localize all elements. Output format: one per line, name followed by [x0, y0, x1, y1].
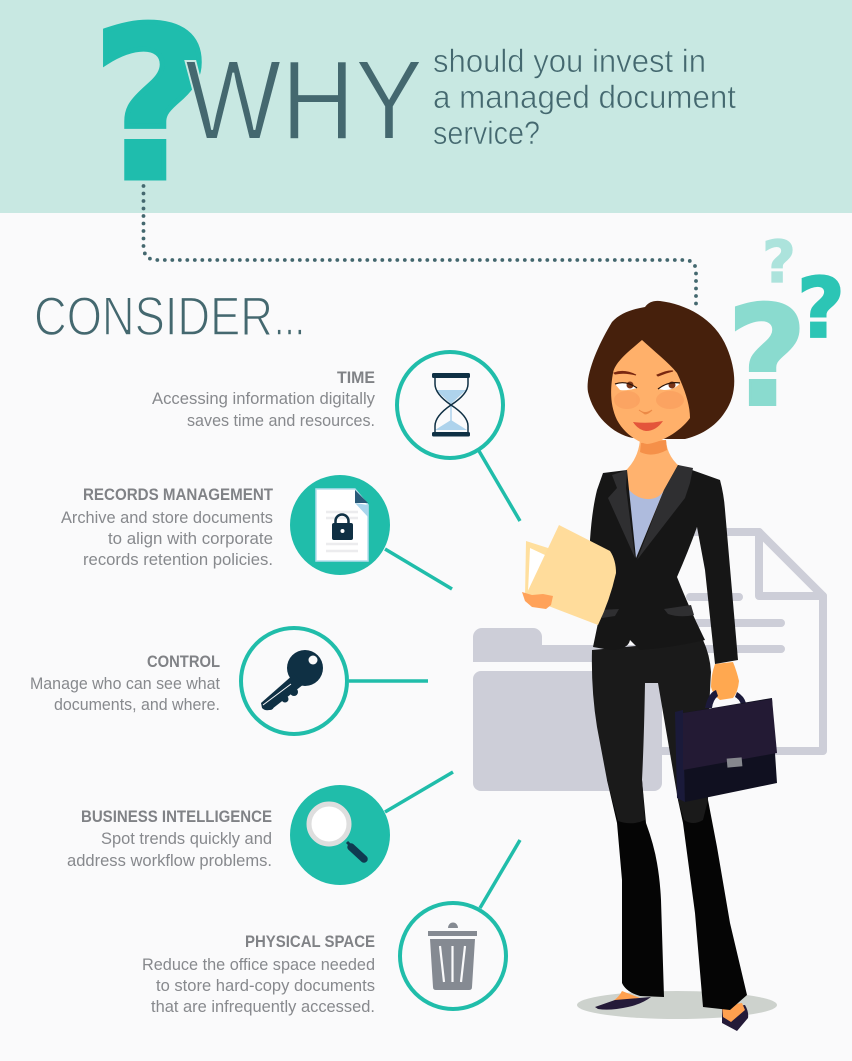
right hand — [711, 662, 739, 700]
connector: control — [349, 679, 428, 683]
question mark: large pale: ? — [727, 276, 807, 438]
hair — [588, 301, 734, 439]
lower trouser legs — [607, 780, 747, 1010]
text: time — [152, 368, 376, 430]
title subtitle — [433, 43, 736, 151]
connector: physical space — [480, 840, 520, 908]
ground shadow — [577, 991, 777, 1019]
text: physical space: PHYSICAL SPACE — [245, 932, 375, 951]
text: records management: RECORDS MANAGEMENT — [83, 485, 274, 504]
title subtitle: service? — [433, 115, 540, 151]
text: physical space: that are infrequently accessed. — [151, 998, 375, 1016]
title word WHY: WHY — [185, 37, 423, 163]
text: business intelligence: address workflow problems. — [67, 852, 272, 870]
icon: trash can — [400, 903, 506, 1009]
top — [626, 486, 664, 558]
text: records management: records retention policies. — [83, 551, 273, 569]
text: physical space: Reduce the office space needed — [142, 956, 375, 974]
background document icon — [660, 532, 823, 751]
lapels — [600, 465, 694, 618]
left hand — [522, 592, 553, 609]
text: records management: to align with corporate — [108, 530, 273, 548]
text: records management — [61, 485, 274, 569]
jacket — [590, 465, 738, 664]
question mark: small teal: ? — [797, 260, 845, 357]
text: business intelligence — [67, 807, 272, 870]
background folder icon — [473, 628, 662, 791]
text: time: saves time and resources. — [187, 412, 375, 430]
icon: magnifying glass — [290, 785, 390, 885]
text: business intelligence: Spot trends quickly and — [101, 830, 272, 848]
cheeks — [614, 391, 684, 409]
header band — [0, 0, 852, 228]
briefcase — [675, 690, 777, 802]
text: control: CONTROL — [147, 652, 220, 671]
icon: key — [241, 628, 347, 734]
connector: business intelligence — [385, 772, 453, 812]
lips — [633, 421, 663, 431]
question mark: small top: ? — [762, 228, 796, 296]
title subtitle: a managed document — [433, 79, 736, 115]
connector: time — [479, 451, 520, 521]
eyes and brows — [614, 371, 680, 390]
text: control: documents, and where. — [54, 696, 220, 714]
face — [611, 340, 690, 444]
nose — [639, 410, 652, 414]
text: physical space — [142, 932, 375, 1016]
text: time: Accessing information digitally — [152, 390, 376, 408]
dotted connector from question mark to woman — [144, 186, 696, 308]
feet and shoes — [595, 991, 748, 1031]
neck and chest — [624, 440, 684, 530]
connector: records — [385, 549, 452, 589]
heading CONSIDER: CONSIDER — [34, 285, 273, 347]
text: control — [30, 652, 220, 714]
heading CONSIDER: ... — [274, 285, 305, 347]
text: control: Manage who can see what — [30, 675, 220, 693]
icon: hourglass — [397, 352, 503, 458]
folder held under arm — [522, 525, 616, 625]
text: business intelligence: BUSINESS INTELLIGENCE — [81, 807, 272, 826]
text: time: TIME — [337, 368, 375, 387]
icon: locked document — [290, 475, 390, 575]
text: physical space: to store hard-copy documents — [156, 977, 375, 995]
title subtitle: should you invest in — [433, 43, 706, 79]
text: records management: Archive and store documents — [61, 509, 273, 527]
upper trousers — [592, 640, 711, 823]
woman illustration — [522, 301, 777, 1031]
